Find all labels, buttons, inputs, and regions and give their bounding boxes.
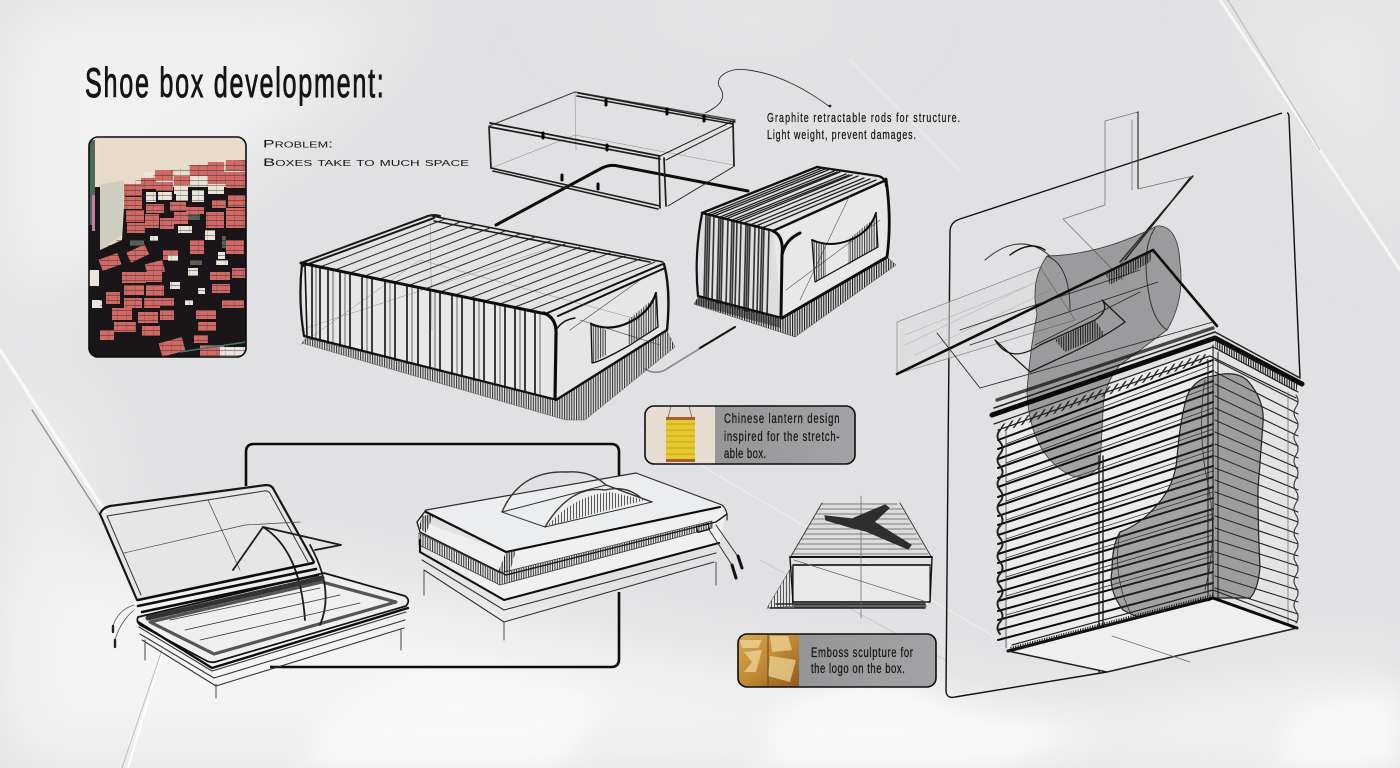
text block: problem statement: Problem: — [263, 138, 333, 150]
vertical corner — [1208, 345, 1218, 600]
sketch: large expanded box — [300, 215, 675, 420]
shadow hatching — [302, 331, 675, 420]
text block: graphite rods annotation: Light weight, prevent damages. — [767, 128, 916, 143]
emboss photo — [738, 634, 799, 687]
sketch: small box with logo — [767, 496, 932, 618]
right face lines — [1215, 360, 1298, 614]
medium box handle — [812, 213, 878, 282]
side tassels — [708, 525, 739, 565]
ghost panel — [897, 267, 1075, 374]
handle window — [502, 485, 652, 527]
callout: Chinese lantern: Chinese lantern design — [724, 410, 840, 427]
face fills — [1002, 347, 1213, 651]
callout: emboss sculpture — [738, 634, 936, 687]
lower foot — [1111, 374, 1263, 622]
lid handle — [995, 300, 1125, 372]
text block: graphite rods annotation — [767, 111, 960, 143]
sketch: open box with lid — [100, 485, 409, 698]
handle — [591, 293, 658, 363]
panel: photo of piled shoe boxes — [89, 137, 246, 357]
callout: emboss sculpture: the logo on the box. — [811, 660, 905, 677]
callout: Chinese lantern: able box. — [724, 445, 766, 462]
sketch: graphite rod wireframe box — [489, 92, 735, 209]
tassels — [113, 605, 134, 640]
logo mark — [825, 505, 911, 549]
frame: lower sketches bracket — [246, 444, 619, 667]
sketch: closed box with handle — [417, 472, 742, 640]
sketch: big box with foot cutaway — [897, 112, 1302, 672]
horizontal bellows, left face — [998, 360, 1213, 640]
callout: emboss sculpture: Emboss sculpture for — [811, 644, 913, 661]
text block: graphite rods annotation: Graphite retractable rods for structure. — [767, 111, 960, 126]
upper foot cylinder — [1027, 226, 1181, 477]
wavy sides — [998, 430, 1002, 634]
text block: problem statement: Boxes take to much space — [263, 157, 469, 169]
open lid — [897, 250, 1217, 374]
sketch: medium compressed box — [694, 167, 896, 337]
lantern photo — [645, 406, 715, 464]
annotation leader line — [705, 69, 830, 113]
frame: transparent page behind big box — [946, 113, 1300, 697]
annotation dot — [829, 105, 831, 107]
rim — [997, 328, 1213, 400]
base — [1008, 600, 1297, 672]
callout: Chinese lantern: inspired for the stretch- — [724, 428, 840, 445]
text block: problem statement — [263, 138, 469, 169]
callout: Chinese lantern — [645, 406, 855, 464]
triangular flap — [233, 527, 341, 625]
connector lines between boxes — [496, 165, 748, 372]
medium box shadow — [694, 258, 896, 337]
ghost arrow — [1063, 112, 1193, 280]
title: Shoe box development: — [85, 61, 384, 107]
